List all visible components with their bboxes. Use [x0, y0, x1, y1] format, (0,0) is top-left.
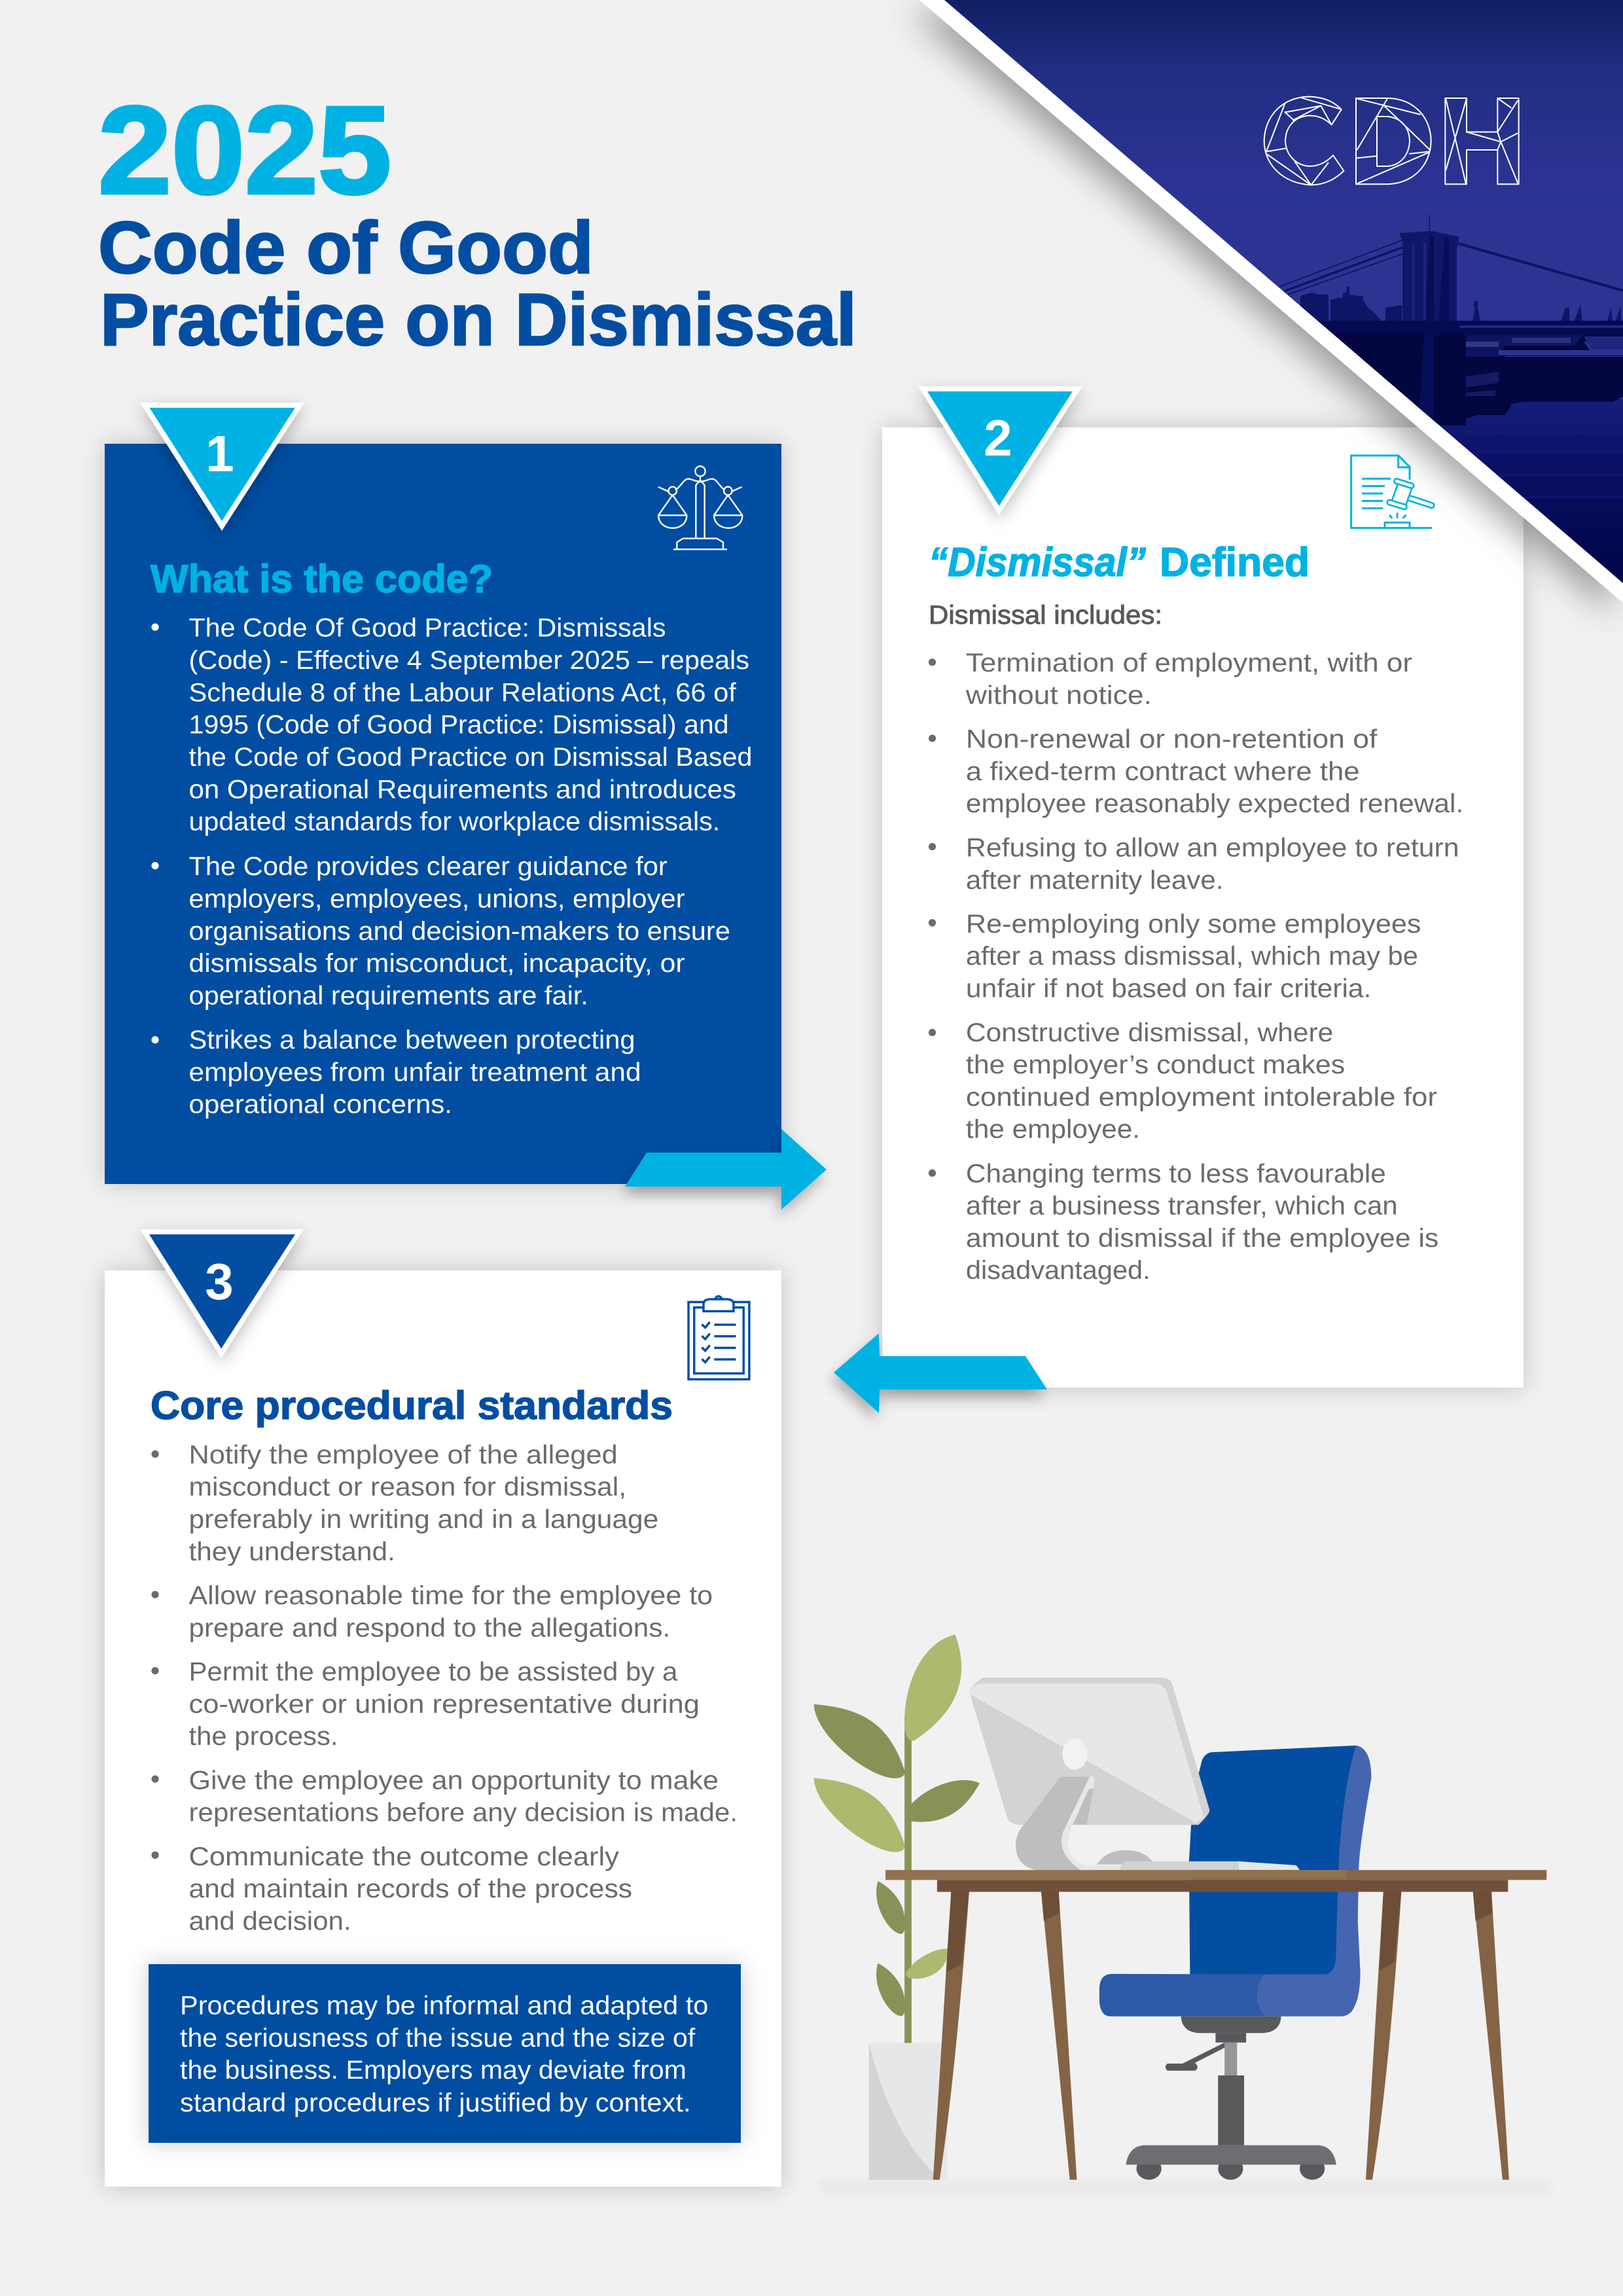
body text: (Code) - Effective 4 September 2025 – repeals: [188, 645, 749, 675]
arrow: panel 1 to panel 2: [625, 1129, 827, 1210]
body text: employee reasonably expected renewal.: [966, 789, 1463, 818]
badge: number 3: [140, 1229, 304, 1358]
body text: Constructive dismissal, where: [966, 1018, 1333, 1047]
icon: scales of justice: [658, 466, 742, 549]
floor shadow: [821, 2179, 1552, 2193]
heading: dismissal defined: [929, 540, 1310, 585]
body text: on Operational Requirements and introduces: [188, 774, 736, 804]
body text: Give the employee an opportunity to make: [188, 1765, 719, 1795]
callout: procedures note: [149, 1964, 741, 2143]
badge: number 2: 2: [984, 409, 1012, 467]
body text: preferably in writing and in a language: [188, 1505, 658, 1534]
panel: what is the code: [105, 444, 781, 1184]
body text: The Code Of Good Practice: Dismissals: [188, 613, 666, 643]
icon: document and gavel: [1351, 456, 1435, 528]
panel content: dismissal defined: [929, 456, 1463, 1285]
body text: employers, employees, unions, employer: [188, 884, 685, 913]
badge: number 1: [140, 403, 304, 531]
title: Practice on Dismissal: [100, 279, 857, 361]
body text: Communicate the outcome clearly: [188, 1842, 620, 1871]
chair: [1099, 1746, 1371, 2179]
desk: [885, 1870, 1546, 2179]
title: Code of Good: [98, 207, 594, 289]
badge: number 3: 3: [205, 1253, 234, 1310]
body text: Termination of employment, with or: [966, 648, 1412, 677]
body text: the employee.: [966, 1115, 1140, 1144]
body text: misconduct or reason for dismissal,: [188, 1472, 626, 1501]
body text: operational concerns.: [188, 1090, 452, 1119]
body text: Notify the employee of the alleged: [188, 1440, 618, 1469]
body text: without notice.: [965, 680, 1152, 709]
body text: [151, 1440, 738, 1935]
body text: Changing terms to less favourable: [966, 1158, 1386, 1188]
body text: after a business transfer, which can: [966, 1191, 1398, 1221]
panel: core procedural standards: [105, 1270, 781, 2187]
suspension cables: [1279, 240, 1623, 295]
body text: after maternity leave.: [966, 865, 1224, 895]
body text: co-worker or union representative during: [188, 1689, 700, 1719]
photo: brooklyn bridge: [944, 0, 1623, 589]
heading: dismissal defined: “Dismissal”: [929, 540, 1146, 585]
body text: the employer’s conduct makes: [966, 1050, 1345, 1079]
body text: amount to dismissal if the employee is: [966, 1223, 1438, 1253]
body text: organisations and decision-makers to ensure: [188, 916, 730, 946]
body text: operational requirements are fair.: [188, 980, 588, 1010]
bridge tower: [1397, 215, 1459, 425]
body text: after a mass dismissal, which may be: [966, 941, 1418, 971]
callout: procedures note: the business. Employers may deviate from: [180, 2055, 687, 2085]
body text: a fixed-term contract where the: [966, 757, 1360, 786]
plant: [814, 1634, 980, 2179]
body text: Strikes a balance between protecting: [188, 1025, 635, 1054]
body text: [929, 648, 1463, 1285]
badge: number 1: 1: [205, 425, 234, 482]
subheading: dismissal includes: Dismissal includes:: [929, 601, 1162, 630]
diagonal white band: [919, 0, 1623, 603]
body text: the process.: [188, 1721, 338, 1751]
logo: CDH: [1264, 97, 1519, 185]
callout: procedures note: the seriousness of the issue and the size of: [180, 2023, 696, 2053]
arrow: panel 2 to panel 3: [834, 1333, 1047, 1413]
monitor and keyboard: [969, 1677, 1300, 1870]
body text: dismissals for misconduct, incapacity, or: [188, 948, 685, 978]
body text: Non-renewal or non-retention of: [966, 725, 1378, 754]
body text: and decision.: [188, 1906, 351, 1935]
panel: dismissal defined: [882, 427, 1524, 1388]
body text: they understand.: [188, 1537, 395, 1566]
city buildings: [1300, 287, 1622, 324]
heading: core procedural standards: Core procedural standards: [151, 1384, 673, 1427]
body text: Re-employing only some employees: [966, 909, 1421, 939]
badge: number 2: [918, 386, 1082, 515]
water: [1409, 399, 1623, 583]
bridge deck: [1317, 321, 1623, 335]
body text: Refusing to allow an employee to return: [966, 833, 1459, 862]
title: [98, 81, 857, 361]
callout: procedures note: Procedures may be informal and adapted to: [180, 1991, 708, 2020]
body text: continued employment intolerable for: [966, 1082, 1437, 1111]
icon: clipboard checklist: [688, 1296, 749, 1379]
body text: employees from unfair treatment and: [188, 1057, 641, 1086]
body text: unfair if not based on fair criteria.: [966, 973, 1371, 1003]
body text: The Code provides clearer guidance for: [188, 852, 668, 881]
heading: what is the code: What is the code?: [151, 557, 493, 601]
callout: procedures note: standard procedures if justified by context.: [180, 2088, 691, 2117]
title: 2025: [98, 81, 391, 220]
illustration: desk with monitor, chair and plant: [814, 1634, 1552, 2193]
body text: updated standards for workplace dismissals.: [188, 807, 720, 836]
body text: Permit the employee to be assisted by a: [188, 1657, 678, 1687]
land below deck: [1302, 334, 1623, 425]
body text: Allow reasonable time for the employee to: [188, 1581, 713, 1610]
body text: Schedule 8 of the Labour Relations Act, 66 of: [188, 677, 737, 707]
body text: prepare and respond to the allegations.: [188, 1613, 670, 1642]
body text: disadvantaged.: [966, 1255, 1150, 1285]
heading: dismissal defined: Defined: [1160, 540, 1310, 585]
body text: representations before any decision is made.: [188, 1798, 738, 1827]
body text: [151, 613, 752, 1119]
body text: the Code of Good Practice on Dismissal Based: [188, 742, 752, 772]
body text: 1995 (Code of Good Practice: Dismissal) and: [188, 710, 729, 740]
body text: and maintain records of the process: [188, 1874, 632, 1903]
